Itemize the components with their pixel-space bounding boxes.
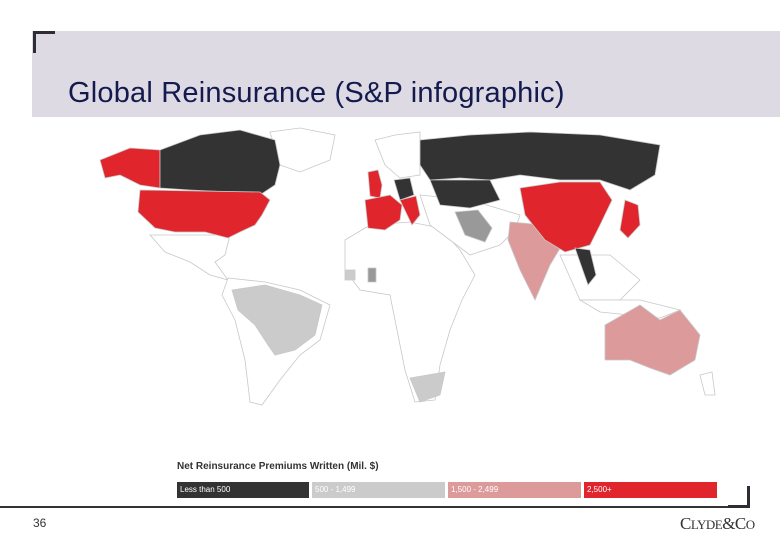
bottom rule [0,506,748,508]
corner bracket bottom-right [728,486,750,508]
Italy/Switzerland [400,196,420,225]
Australia [605,305,700,375]
logo: CLYDE&CO [680,514,755,533]
Brazil [232,285,322,355]
UK [368,170,382,198]
India [508,222,562,300]
South Africa [410,372,445,402]
Vietnam [575,248,596,285]
China [520,182,612,252]
land: base continents [150,128,640,405]
legend bars: 1,500 - 2,499 [451,485,498,494]
legend bars: Less than 500 [180,485,230,494]
Iran [455,210,492,242]
Kazakhstan [430,180,500,208]
France/Spain [365,195,402,230]
USA [138,190,270,238]
Germany [394,178,414,200]
Russia [420,132,660,190]
page number: 36 [33,516,46,530]
legend bars: 2,500+ [587,485,612,494]
West Africa country [368,268,376,282]
Indonesia [580,300,680,318]
legend title: Net Reinsurance Premiums Written (Mil. $) [177,461,379,472]
legend bars [177,482,717,498]
Japan [620,200,640,238]
corner bracket top-left [33,31,55,53]
title: Global Reinsurance (S&P infographic) [68,77,565,109]
Alaska [100,148,160,188]
legend bars: 500 - 1,499 [315,485,355,494]
Canada [160,130,280,195]
header band [32,31,780,117]
